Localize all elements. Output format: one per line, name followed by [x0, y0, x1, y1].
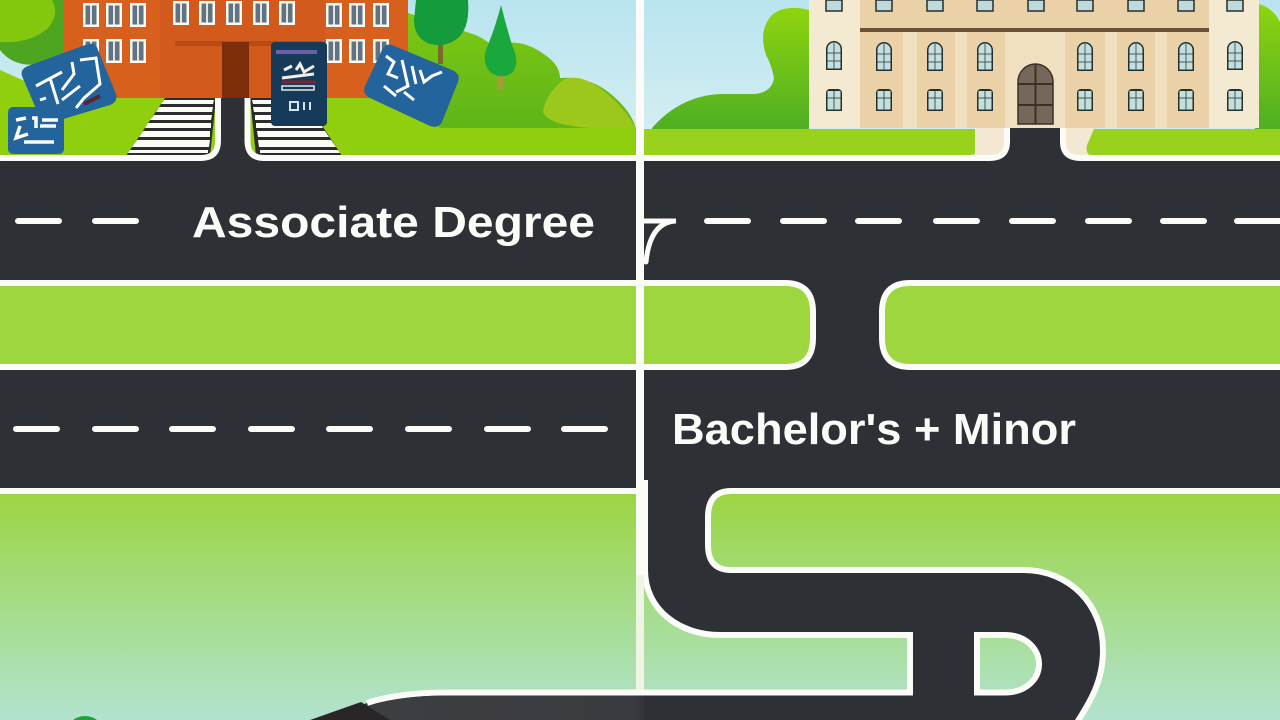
- median: right green strip B: [882, 283, 1280, 367]
- tree: conifer: [485, 5, 516, 90]
- hill: right of building: [408, 13, 636, 140]
- building: palace: [809, 0, 1259, 128]
- scene: right campus: [644, 0, 1280, 160]
- circle: green bush: [65, 716, 105, 720]
- lawn: enclosed D shape: [977, 635, 1039, 692]
- hill: small light: [543, 78, 636, 128]
- road: dark wedge at bottom left: [310, 702, 390, 720]
- dashes: upper right lane: [707, 218, 1280, 224]
- road: connector between bands: [644, 283, 1280, 367]
- dashes: lower left lane: [16, 426, 605, 432]
- lawn: right: [1087, 129, 1280, 155]
- road: winding path outline: [367, 480, 1280, 720]
- lawn: lower gradient field: [0, 491, 1280, 720]
- lawn: left: [644, 129, 981, 155]
- windows: [826, 0, 1243, 111]
- scene: left campus: [0, 0, 636, 160]
- ground: [0, 70, 636, 155]
- hill: far left: [0, 0, 63, 65]
- line: right stem edge: [248, 98, 636, 158]
- crosswalk: left: [126, 98, 216, 156]
- label: Associate Degree: Associate Degree: [192, 198, 595, 247]
- divider: centre line: [636, 0, 644, 690]
- path: cream: [975, 128, 1093, 156]
- hill: right of palace: [1255, 3, 1280, 130]
- line: palace stem left edge: [644, 128, 1007, 158]
- road: bottom lighter stretch: [340, 696, 644, 720]
- dashes: upper left lane: [18, 218, 136, 224]
- door: [1018, 64, 1053, 124]
- line: lower left road edge: [0, 488, 644, 494]
- label: Bachelor's + Minor: Bachelor's + Minor: [672, 405, 1076, 454]
- windows: [83, 1, 389, 63]
- crosswalk: right: [250, 98, 342, 156]
- door: [222, 42, 249, 98]
- sign: dark navy poster: [271, 42, 327, 126]
- building: brick school: [63, 0, 408, 98]
- line: left stem edge: [0, 98, 218, 158]
- tree: round: [414, 0, 468, 64]
- sign: small blue: [8, 107, 64, 154]
- median: left green strip: [0, 283, 640, 367]
- road: upper band: [0, 158, 1280, 283]
- sign: tilted blue: [364, 45, 459, 127]
- road: winding path fill: [300, 480, 1280, 720]
- road: left stem to school: [0, 98, 636, 165]
- sign: blue map: [22, 44, 116, 123]
- median: right green strip A: [640, 283, 813, 367]
- road: lower band: [0, 367, 1280, 491]
- road: right stem to palace: [992, 128, 1078, 158]
- line: palace stem right edge: [1063, 128, 1280, 158]
- junction mark: [644, 221, 676, 262]
- hill: left of palace: [652, 8, 809, 130]
